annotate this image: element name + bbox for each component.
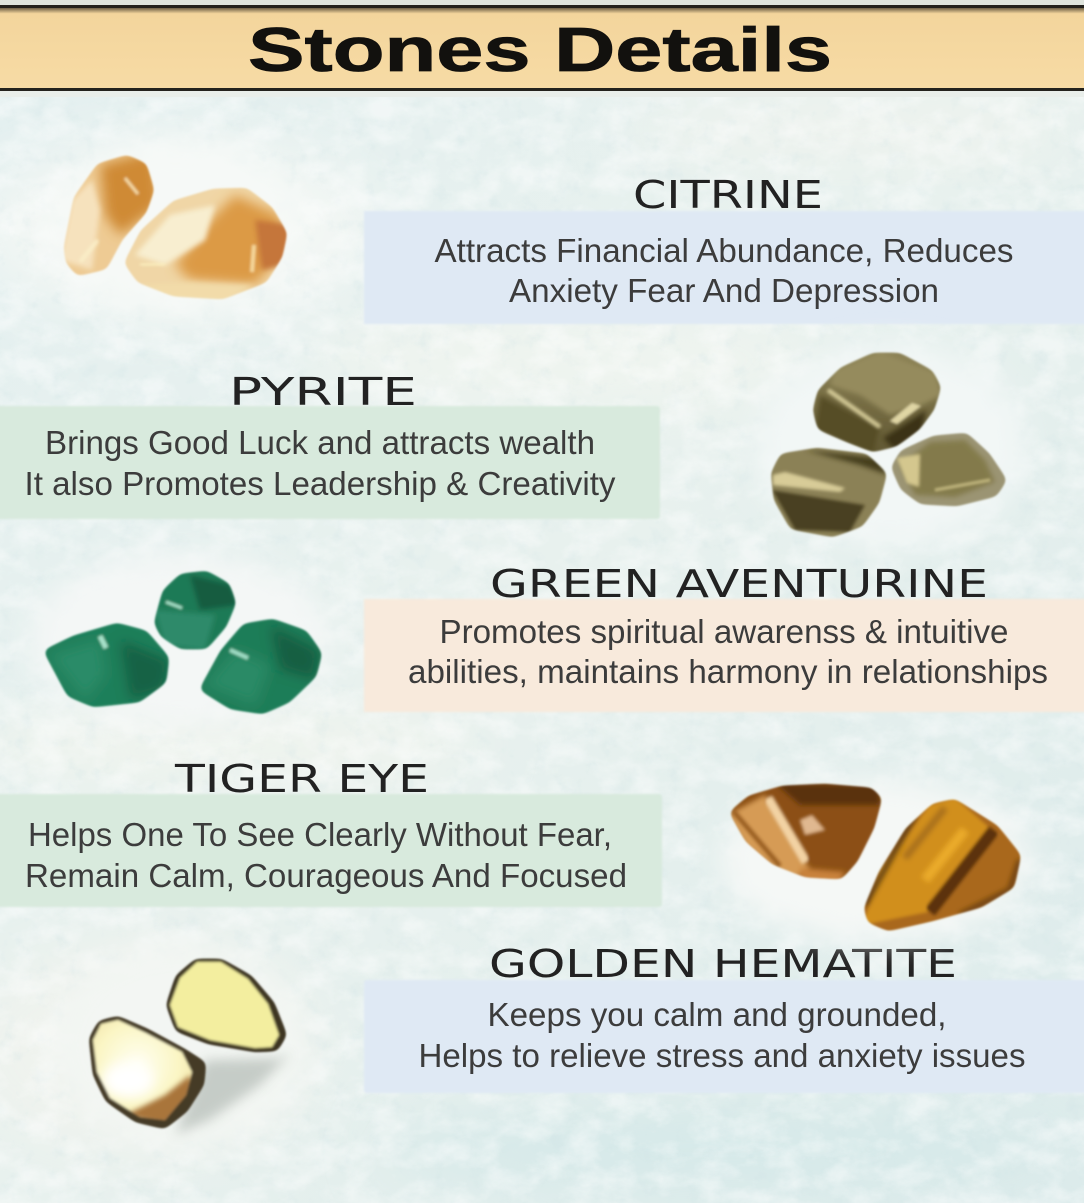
panel: golden hematite text (364, 942, 1084, 1093)
description: pyrite: Brings Good Luck and attracts wealth (45, 424, 595, 461)
description: golden hematite: Helps to relieve stress and anxiety issues (418, 1037, 1026, 1074)
icon: citrine stones (63, 154, 288, 301)
panel: green aventurine text (364, 562, 1084, 712)
description: pyrite: It also Promotes Leadership & Creativity (24, 465, 616, 502)
title: Stones Details (248, 16, 832, 85)
panel: tiger eye text (0, 757, 662, 907)
description: tiger eye: Remain Calm, Courageous And Focused (25, 857, 627, 894)
description: citrine: Attracts Financial Abundance, Reduces (434, 232, 1014, 269)
header banner (0, 0, 1084, 97)
panel: pyrite text (0, 370, 660, 519)
heading: tiger eye: TIGER EYE (174, 757, 429, 801)
description: citrine: Anxiety Fear And Depression (509, 272, 939, 309)
heading: citrine: CITRINE (633, 173, 823, 217)
heading: pyrite: PYRITE (229, 370, 417, 414)
icon: golden hematite stones (88, 957, 288, 1135)
icon: pyrite stones (755, 345, 1025, 545)
panel: citrine text (364, 173, 1084, 324)
heading: green aventurine: GREEN AVENTURINE (490, 562, 988, 606)
description: golden hematite: Keeps you calm and grounded, (488, 996, 946, 1033)
icon: green aventurine stones (30, 555, 330, 725)
heading: golden hematite: GOLDEN HEMATITE (489, 942, 957, 986)
icon: tiger eye stones (720, 780, 1030, 940)
description: green aventurine: Promotes spiritual awarenss & intuitive (440, 613, 1008, 650)
description: tiger eye: Helps One To See Clearly Without Fear, (28, 816, 612, 853)
description: green aventurine: abilities, maintains harmony in relationships (408, 653, 1048, 690)
